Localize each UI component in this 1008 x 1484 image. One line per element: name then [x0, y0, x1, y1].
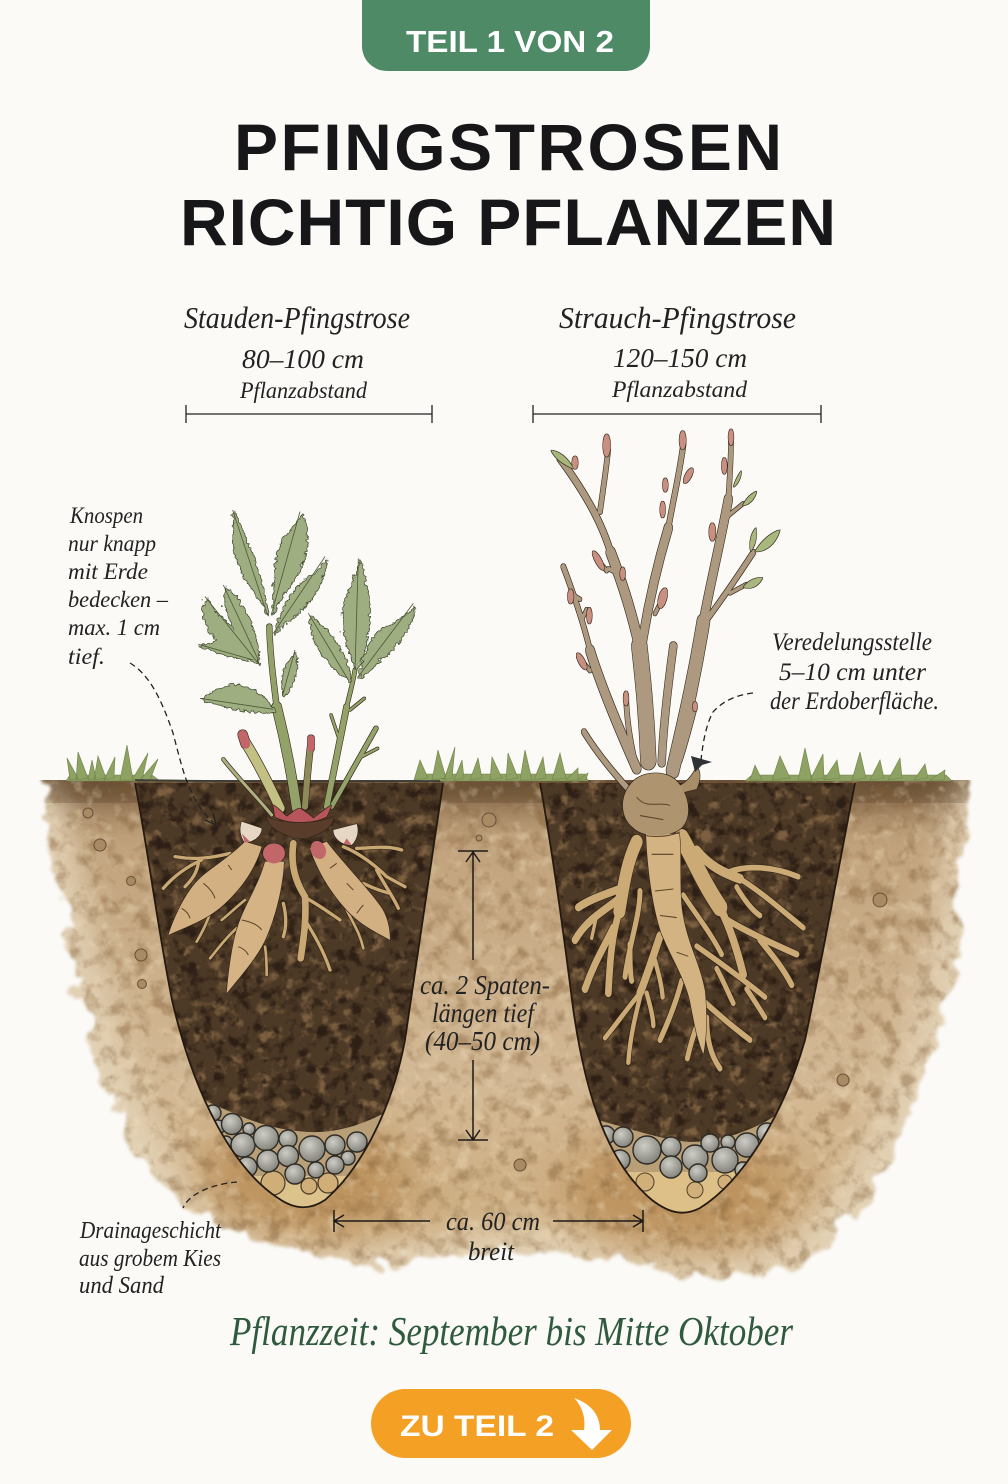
planting hole: left [130, 780, 450, 1220]
callout: drainage: Drainageschicht [79, 1218, 222, 1244]
graft marker [691, 756, 712, 772]
grass tufts [66, 745, 952, 781]
dimension: width [334, 1207, 643, 1266]
taproot and knob [623, 767, 706, 1054]
heading: Stauden-Pfingstrose spacing: Pflanzabstand [239, 378, 367, 403]
planting hole: right [535, 780, 860, 1220]
heading: Stauden-Pfingstrose spacing: Stauden-Pfingstrose [184, 300, 410, 335]
hole outline: right [540, 783, 855, 1213]
dimension: depth [420, 851, 550, 1140]
dimension: depth: (40–50 cm) [425, 1026, 540, 1056]
callout: buds: nur knapp [68, 531, 156, 556]
roots [575, 838, 803, 1069]
buds [551, 429, 780, 712]
callout: buds [68, 503, 216, 825]
drainage layer: left [206, 1101, 382, 1206]
drainage layer: right [600, 1116, 774, 1212]
tab: part 1 of 2: TEIL 1 VON 2 [406, 24, 614, 59]
callout: graft union: Veredelungsstelle [772, 629, 932, 656]
dimension: width: ca. 60 cm [446, 1207, 540, 1236]
callout: graft union [701, 629, 939, 760]
heading: Stauden-Pfingstrose spacing [184, 300, 432, 423]
crown [267, 805, 333, 838]
callout: drainage [79, 1182, 237, 1299]
tubers [168, 822, 390, 993]
callout: buds: mit Erde [68, 559, 148, 584]
heading: Strauch-Pfingstrose spacing: Strauch-Pfingstrose [559, 300, 796, 335]
stems [223, 627, 378, 815]
branches [560, 440, 753, 789]
callout: buds: max. 1 cm [68, 615, 160, 640]
callout: buds: Knospen [69, 503, 143, 528]
heading: Strauch-Pfingstrose spacing [533, 300, 821, 423]
tab: part 1 of 2 [362, 0, 650, 71]
title: RICHTIG PFLANZEN [180, 185, 836, 259]
callout: buds: bedecken – [68, 587, 168, 612]
icon: curved arrow [571, 1398, 612, 1450]
ground line [135, 780, 440, 781]
callout: graft union: 5–10 cm unter [779, 659, 926, 686]
plant: Stauden-Pfingstrose [163, 510, 413, 993]
callout: drainage: und Sand [79, 1273, 165, 1299]
callout: drainage: aus grobem Kies [79, 1246, 221, 1272]
soil cross-section [38, 780, 972, 1282]
leaf veins [198, 510, 413, 709]
tuber markings [182, 863, 363, 955]
title: PFINGSTROSEN [234, 110, 782, 184]
planting time: Pflanzzeit: September bis Mitte Oktober [229, 1308, 794, 1354]
dimension: depth: ca. 2 Spaten- [420, 970, 550, 1000]
button: to part 2 [371, 1389, 631, 1458]
dimension: width: breit [468, 1237, 515, 1266]
fine roots: herbaceous peony [163, 843, 405, 975]
callout: graft union: der Erdoberfläche. [770, 688, 939, 715]
leaves [198, 510, 413, 710]
callout: buds: tief. [68, 644, 105, 669]
dimension: depth: längen tief [432, 998, 537, 1028]
root markings [633, 797, 688, 956]
title [180, 110, 836, 259]
heading: Stauden-Pfingstrose spacing: 80–100 cm [242, 344, 364, 374]
heading: Strauch-Pfingstrose spacing: Pflanzabstand [611, 377, 748, 402]
hole outline: left [135, 783, 443, 1207]
plant: Strauch-Pfingstrose [551, 429, 803, 1069]
heading: Strauch-Pfingstrose spacing: 120–150 cm [613, 343, 747, 373]
button: to part 2: ZU TEIL 2 [400, 1410, 554, 1443]
